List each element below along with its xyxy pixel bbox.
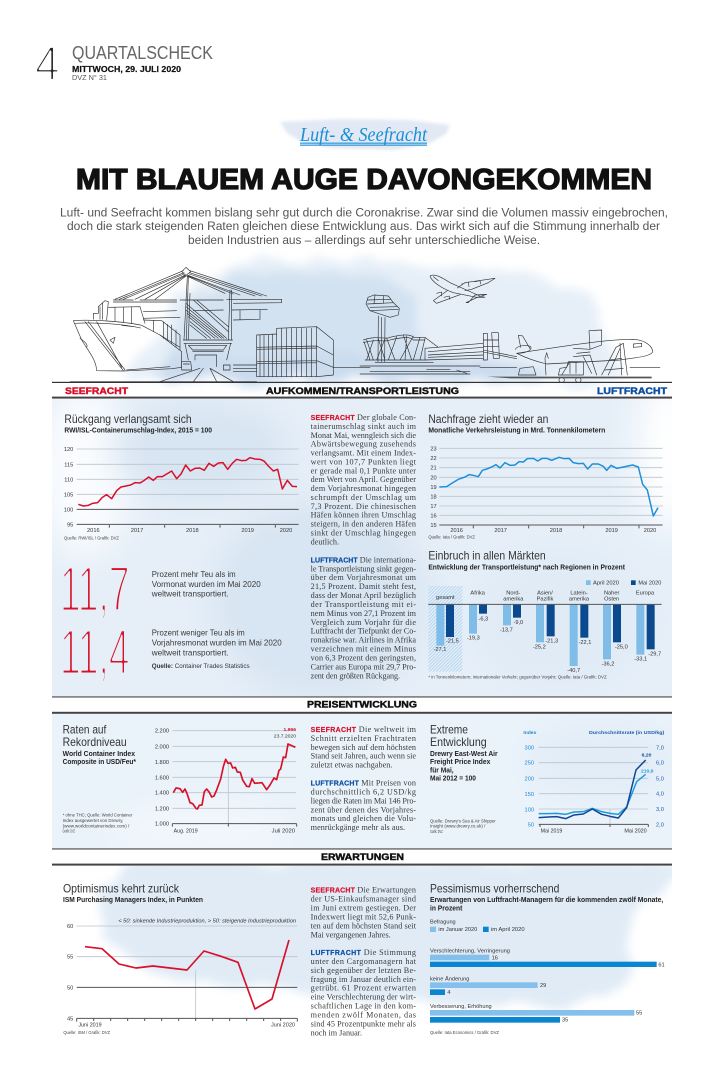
line chart: air freight price index: Drewry East-West Air [430,749,498,758]
source: Quelle: Drewry's Sea & Air Shipper [430,819,496,824]
line chart: container index: 2016 [87,528,100,534]
label: section name: AUFKOMMEN/TRANSPORTLEISTUNG [266,386,459,397]
main headline: MIT BLAUEM AUGE DAVONGEKOMMEN [76,164,652,196]
line chart: air freight price index: 4,0 [656,791,664,797]
line chart: container rates [63,724,297,835]
bar chart: air freight manager expectations: 29 [540,983,546,989]
legend: Befragung [430,920,456,926]
bar chart: air freight manager expectations [430,882,665,1035]
icon: container stack [257,327,370,377]
text block: volume commentary: deutlich. [311,537,339,546]
footnote [63,813,133,834]
text block: volume commentary: SEEFRACHT Der globale Con- [311,413,416,422]
bar chart: regional decline: -40,7 [567,668,580,674]
text block: volume commentary: der Transportleistung mit ei- [311,600,416,609]
line chart: container rates: Aug. 2019 [174,829,198,835]
key figure: 11,7 [64,568,260,618]
line chart: air freight price index: 200 [525,776,534,782]
line chart: air traffic demand: 2020 [644,528,656,534]
line chart: container rates: Composite in USD/Feu* [63,757,136,766]
key figure: 11,7: Vormonat wurden im Mai 2020 [152,580,261,589]
text block: volume commentary: 21,5 Prozent. Damit steht fest, [311,582,416,591]
label: air freight: LUFTFRACHT [597,386,667,397]
footnote: (www.worldcontainerindex.com) / [63,823,130,828]
key figure: 11,7: Prozent mehr Teu als im [152,570,236,579]
line chart: container rates: 1.996 [284,727,296,733]
text block: expectations commentary: sich gegenüber der letzten Be- [311,966,416,975]
text block: expectations commentary: menden zwölf Monaten, das [311,1011,416,1020]
icon: gantry crane [113,267,282,367]
bar chart: regional decline: amerika [503,597,524,603]
text block: price commentary: Stand seit Jahren, auch wenn sie [311,752,416,761]
bar chart: regional decline: Nord- [506,590,521,596]
line chart: air traffic demand: 18 [430,494,437,500]
header: page title and date: MITTWOCH, 29. JULI 2020 [72,64,181,74]
line chart: container index [64,413,299,540]
bar chart: air freight manager expectations: 55 [636,1011,642,1017]
key figure: 11,4 [64,630,282,681]
line chart: air freight price index: 3,0 [656,807,664,813]
line chart: air freight price index: 6,0 [656,761,664,767]
bar chart: air freight manager expectations: 4 [447,990,450,996]
line chart: air freight price index: Freight Price Index [430,757,491,766]
bar chart: regional decline: -22,1 [579,640,591,646]
bar chart: regional decline: Entwicklung der Transportleistung* nach Regionen in Prozent [428,562,626,571]
topic tag [280,119,450,150]
text block: volume commentary: sinkt der Umschlag hingegen [311,528,416,537]
intro text: Luft- und Seefracht kommen bislang sehr gut durch die Coronakrise. Zwar sind die Volumen massiv eingebrochen, [60,206,668,220]
line chart: container index: 2018 [186,528,199,534]
text block: volume commentary: steigern, in den anderen Häfen [311,520,416,529]
watercolor background: section 2 [52,714,672,855]
legend: Mai 2020 [638,580,661,586]
line chart: container rates: World Container Index [63,749,136,758]
bar chart: regional decline: -27,1 [434,647,446,653]
line chart: air freight price index: 5,0 [656,776,664,782]
line chart: air traffic demand: 2019 [605,528,618,534]
text block: volume commentary: schrumpft der Umschlag um [311,493,417,502]
bar chart: regional decline: -33,1 [634,657,647,663]
bar chart: regional decline: Europa [636,590,655,596]
text block: volume commentary: ronakrise war. Airlines in Afrika [311,636,416,645]
line chart: air traffic demand: 20 [430,475,437,481]
label: sea freight: SEEFRACHT [65,386,128,397]
bar chart: regional decline: Naher [604,590,619,596]
line chart: purchasing managers index: Juni 2020 [271,1023,295,1029]
legend [586,580,661,586]
text block: expectations commentary: eine Verschlechterung der wirt- [311,993,416,1002]
section header: expectations: ERWARTUNGEN [321,852,404,863]
text block: expectations commentary: der US-Einkaufsmanager sind [311,895,416,904]
bar chart: regional decline: Pazifik [537,597,553,603]
line chart: air freight price index: Extreme [430,724,468,737]
page number: 4 [35,36,60,90]
text block: volume commentary: Carrier aus Europa mit 29,7 Pro- [311,662,416,671]
bar chart: air freight manager expectations: Erwartungen von Luftfracht-Managern für die kommenden zwölf Monate, [430,895,663,904]
text block: volume commentary: le Transportleistung sinkt gegen- [311,564,416,573]
line chart: air traffic demand: 22 [430,456,437,462]
bar chart: regional decline: Osten [604,597,619,603]
line chart: air freight price index: 210,9 [641,769,654,775]
text block: volume commentary: Vergleich zum Vorjahr für die [311,618,416,627]
header: page title and date [72,43,213,82]
text block: volume commentary: dass der Monat April bezüglich [311,591,416,600]
text block: expectations commentary: schaftlichen Lage in den kom- [311,1002,416,1011]
watercolor background: illustration [125,258,628,382]
bar chart: regional decline: -25,2 [533,645,546,651]
line chart: container rates: 1.200 [155,806,169,812]
icon: control tower [366,295,399,362]
line chart: air traffic demand: Quelle: Iata / Grafik: DVZ [428,535,475,540]
line chart: container rates: Rekordniveau [63,736,127,749]
text block: expectations commentary: noch im Januar. [311,1029,362,1038]
line chart: air freight price index: Entwicklung [430,736,487,749]
line chart: purchasing managers index: 45 [67,1017,73,1023]
line chart: container index: Rückgang verlangsamt sich [64,413,192,426]
line chart: air freight price index: 6,20 [642,753,652,759]
icon: cargo airplane at the gate [480,330,660,383]
key figure: 11,4: Vorjahresmonat wurden im Mai 2020 [152,639,282,648]
intro text [60,206,668,247]
text block: volume commentary: er gerade mal 0,1 Punkte unter [311,466,416,475]
illustration: airport [360,275,660,383]
line chart: air freight price index [430,724,665,835]
bar chart: regional decline: -6,3 [478,616,488,622]
line chart: container rates: 2.000 [155,744,169,750]
line chart: air traffic demand: 16 [430,513,437,519]
line chart: air freight price index: 100 [525,807,534,813]
line chart: purchasing managers index: < 50: sinkende Industrieproduktion, > 50: steigende Industrieproduktion [118,919,296,925]
bar chart: air freight manager expectations: 16 [492,955,498,961]
key figure: 11,4: 11,4 [60,618,129,689]
text block: volume commentary: LUFTFRACHT Die internationa- [311,555,416,564]
line chart: air traffic demand: 23 [430,446,437,452]
line chart: container rates: 2.200 [155,729,169,735]
text block: price commentary: menrückgänge mehr als aus. [311,823,405,832]
line chart: air freight price index: Mai 2020 [624,829,647,835]
header: page title and date: QUARTALSCHECK [72,43,213,63]
header: page title and date: DVZ N° 31 [72,73,107,82]
bar chart: regional decline: Afrika [470,590,486,596]
line chart: container index: 2017 [131,528,143,534]
line chart: container rates: 1.600 [155,775,169,781]
text block: price commentary: monats und gleichen die Volu- [311,814,416,823]
line chart: container index: 115 [64,462,73,468]
line chart: air freight price index: Mai 2012 = 100 [430,774,476,783]
bar chart: air freight manager expectations: 61 [658,962,665,968]
text block: expectations commentary: im Juni extrem gestiegen. Der [311,904,416,913]
bar chart: regional decline: -19,3 [467,636,480,642]
line chart: air freight price index: 2,0 [656,822,664,828]
bar chart: regional decline: -29,7 [648,652,661,658]
line chart: air freight price index: Index [523,730,537,736]
text block: price commentary: liegen die Raten im Mai 146 Pro- [311,796,416,805]
bar chart: air freight manager expectations: keine Änderung [430,975,469,982]
source [430,819,496,834]
text block: volume commentary: tainerumschlag sinkt auch im [311,422,417,431]
text block: volume commentary: über dem Vorjahresmonat um [311,573,417,582]
text block: volume commentary: 7,3 Prozent. Die chinesischen [311,502,416,511]
key figure: 11,4: Quelle: Container Trades Statistics [152,663,250,670]
text block: expectations commentary: unter den Cargomanagern hat [311,957,417,966]
text block: volume commentary: dem Vorjahresmonat hingegen [311,484,416,493]
line chart: purchasing managers index: Optimismus kehrt zurück [63,883,179,896]
line chart: container index: 95 [67,522,73,528]
text block: expectations commentary: Mai vergangenen Jahres. [311,931,391,940]
icon: airplane in flight [430,275,495,303]
line chart: air traffic demand: 15 [430,523,437,529]
text block: expectations commentary: getrübt. 61 Prozent erwarten [311,984,416,993]
bar chart: air freight manager expectations: Pessimismus vorherrschend [430,882,559,895]
line chart: container rates: 1.800 [155,760,169,766]
line chart: air freight price index: 150 [525,792,534,798]
text block: expectations commentary: LUFTFRACHT Die Stimmung [311,948,416,957]
source: Insight (www.drewry.co.uk) / [430,824,486,829]
line chart: air traffic demand: 2018 [550,528,562,534]
legend: im Januar 2020 [438,927,477,933]
line chart: air freight price index: Durchschnittsrate (in USD/kg) [589,730,665,736]
line chart: air freight price index: 300 [525,745,534,751]
source: Grafik: DVZ [430,829,443,834]
text block: volume commentary: dem Wert von April. Gegenüber [311,475,416,484]
text block: volume commentary: verzeichnen mit einem Minus [311,645,416,654]
line chart: purchasing managers index: ISM Purchasing Managers Index, in Punkten [63,895,203,904]
line chart: purchasing managers index: 50 [67,985,73,991]
line chart: container rates: Juli 2020 [272,829,295,835]
line chart: air traffic demand: 2016 [450,528,463,534]
text block: expectations commentary: fragung im Januar deutlich ein- [311,975,416,984]
bar chart: air freight manager expectations: in Prozent [430,903,463,912]
footnote: Index ausgewertet von Drewry, [63,818,123,823]
key figure: 11,7: weltweit transportiert. [151,590,229,599]
icon: container ship [73,301,182,371]
line chart: air traffic demand [428,413,663,540]
line chart: air freight price index: 50 [528,823,534,829]
line chart: container index: 110 [64,477,73,483]
footnote: Grafik: DVZ [63,829,75,834]
bar chart: regional decline: -9,0 [513,620,523,626]
bar chart: regional decline: -13,7 [500,627,513,633]
line chart: air freight price index: für Mai, [430,765,454,774]
line chart: container index: Quelle: RWI/ISL / Grafik: DVZ [64,535,119,540]
section header: prices: PREISENTWICKLUNG [307,700,417,711]
text block: volume commentary: zent den größten Rückgang. [311,671,400,680]
topic tag: Luft- & Seefracht [299,124,427,146]
text block: volume commentary: von 6,3 Prozent den geringsten, [311,653,416,662]
text block: volume commentary: Luftfracht der Tiefpunkt der Co- [311,627,416,636]
line chart: air freight price index: 7,0 [656,745,664,751]
line chart: air freight price index: Mai 2019 [541,829,562,835]
text block: volume commentary: wert von 107,7 Punkten liegt [311,457,417,466]
legend [430,920,525,933]
key figure: 11,4: weltweit transportiert. [151,648,229,657]
bar chart: regional decline: -36,2 [602,662,614,668]
bar chart: regional decline [428,550,662,680]
line chart: container rates: 23.7.2020 [274,734,296,740]
line chart: container rates: 1.000 [155,822,169,828]
bar chart: regional decline: -21,3 [545,638,558,644]
bar chart: air freight manager expectations: 35 [562,1018,568,1024]
icon: quay and trucks [70,362,257,382]
line chart: container rates: 1.400 [155,791,169,797]
text block: volume commentary: Abwärtsbewegung zusehends [311,440,416,449]
watercolor background: section 3 [100,860,680,1005]
text block: price commentary: Schnitt erzielten Frachtraten [311,734,416,743]
bar chart: regional decline: * in Tonnenkilometern; internationaler Verkehr; gegenüber Vorjahr; Quelle: Iata / Grafik: DVZ [428,675,607,680]
text block: price commentary: durchschnittlich 6,2 USD/kg [311,787,416,796]
text block: price commentary: zent über denen des Vorjahres- [311,805,416,814]
text block: volume commentary [311,413,417,680]
bar chart: regional decline: Asien/ [537,590,553,596]
legend: April 2020 [593,580,619,586]
text block: volume commentary: Monat Mai, wenngleich sich die [311,431,416,440]
intro text: doch die stark steigenden Raten gleichen diese Entwicklung aus. Das wirkt sich auf die Stimmung innerhalb der [67,219,660,233]
text block: volume commentary: nem Minus von 27,1 Prozent im [311,609,417,618]
text block: expectations commentary: ten auf dem höchsten Stand seit [311,921,417,930]
line chart: container index: 2020 [280,528,292,534]
text block: expectations commentary: Indexwert liegt mit 52,6 Punk- [311,913,416,922]
text block: price commentary: SEEFRACHT Die weltweit im [311,725,417,734]
intro text: beiden Industrien aus – allerdings auf sehr unterschiedliche Weise. [188,233,540,247]
icon: terminal building [360,333,517,374]
bar chart: air freight manager expectations: Quelle: Iata Economics / Grafik: DVZ [430,1030,499,1035]
line chart: purchasing managers index: Quelle: ISM / Grafik: DVZ [63,1030,110,1035]
watercolor background: section 1 [52,399,672,696]
text block: expectations commentary: SEEFRACHT Die Erwartungen [311,886,416,895]
line chart: air traffic demand: 2017 [494,528,507,534]
text block: price commentary: bewegen sich auf dem höchsten [311,743,416,752]
text block: price commentary [311,725,417,832]
line chart: container index: RWI/ISL-Containerumschlag-Index, 2015 = 100 [64,426,212,435]
bar chart: air freight manager expectations: Verschlechterung, Verringerung [430,949,510,955]
text block: volume commentary: verlangsamt. Mit einem Index- [311,449,416,458]
line chart: air traffic demand: 17 [430,504,437,510]
line chart: air freight price index: 250 [525,761,534,767]
line chart: air traffic demand: Nachfrage zieht wieder an [428,413,548,426]
line chart: container rates: Raten auf [63,724,107,737]
text block: price commentary: LUFTFRACHT Mit Preisen von [311,778,416,787]
section header: volume [52,382,672,399]
line chart: air traffic demand: Monatliche Verkehrsleistung in Mrd. Tonnenkilometern [428,426,606,435]
footnote: * ohne THC; Quelle: World Container [63,813,133,818]
line chart: container index: 2019 [241,528,254,534]
line chart: air traffic demand: 21 [430,466,437,472]
line chart: purchasing managers index: 60 [67,924,73,930]
key figure: 11,7: 11,7 [60,555,129,626]
line chart: purchasing managers index: 55 [67,955,73,961]
bar chart: regional decline: Latein- [570,590,588,596]
bar chart: air freight manager expectations: Verbesserung, Erhöhung [430,1004,492,1010]
line chart: purchasing managers index: Juni 2019 [78,1023,102,1029]
line chart: container index: 120 [64,447,73,453]
line chart: air traffic demand: 19 [430,485,437,491]
key figure: 11,4: Prozent weniger Teu als im [152,629,245,638]
line chart: container index: 105 [64,492,73,498]
line chart: purchasing managers index [63,883,297,1035]
text block: expectations commentary [311,886,417,1038]
legend: im April 2020 [491,927,525,933]
bar chart: regional decline: gesamt [436,595,455,601]
bar chart: regional decline: -21,5 [446,638,459,644]
text block: price commentary: zuletzt etwas nachgaben. [311,761,392,770]
bar chart: regional decline: amerika [569,597,590,603]
text block: expectations commentary: sind 45 Prozentpunkte mehr als [311,1020,416,1029]
bar chart: regional decline: -25,0 [615,644,628,650]
text block: volume commentary: Häfen können ihren Umschlag [311,511,416,520]
bar chart: regional decline: Einbruch in allen Märkten [428,550,546,563]
line chart: container index: 100 [64,507,73,513]
illustration: container port [70,267,370,382]
